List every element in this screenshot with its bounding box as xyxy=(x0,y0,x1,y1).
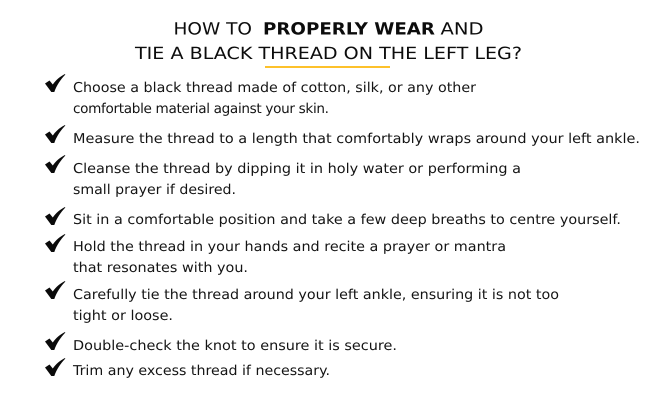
item 5 xyxy=(45,234,506,276)
title underline xyxy=(265,66,390,68)
item 3 xyxy=(45,155,521,198)
item 1: comfortable material against your skin. xyxy=(73,101,329,117)
checklist xyxy=(45,74,640,379)
item 5: that resonates with you. xyxy=(73,260,248,276)
item 1: Choose a black thread made of cotton, silk, or any other xyxy=(73,80,476,96)
item 7 xyxy=(45,332,397,354)
item 5: Hold the thread in your hands and recite a prayer or mantra xyxy=(73,239,506,255)
item 3: small prayer if desired. xyxy=(73,182,236,198)
item 4 xyxy=(45,207,621,228)
item 7: Double-check the knot to ensure it is secure. xyxy=(73,338,397,354)
title: AND xyxy=(440,18,484,38)
title: TIE A BLACK THREAD ON THE LEFT LEG? xyxy=(134,43,522,63)
item 1 xyxy=(45,74,476,117)
item 4: Sit in a comfortable position and take a few deep breaths to centre yourself. xyxy=(73,212,621,228)
item 8: Trim any excess thread if necessary. xyxy=(72,363,330,379)
item 8 xyxy=(45,358,330,379)
title: HOW TO xyxy=(174,18,252,38)
item 2: Measure the thread to a length that comfortably wraps around your left ankle. xyxy=(73,131,640,147)
item 6: Carefully tie the thread around your left ankle, ensuring it is not too xyxy=(73,287,559,303)
item 2 xyxy=(45,125,640,147)
title xyxy=(134,18,522,63)
item 6 xyxy=(45,281,559,324)
item 3: Cleanse the thread by dipping it in holy water or performing a xyxy=(73,161,521,177)
item 6: tight or loose. xyxy=(73,308,173,324)
title: PROPERLY WEAR xyxy=(263,18,435,38)
